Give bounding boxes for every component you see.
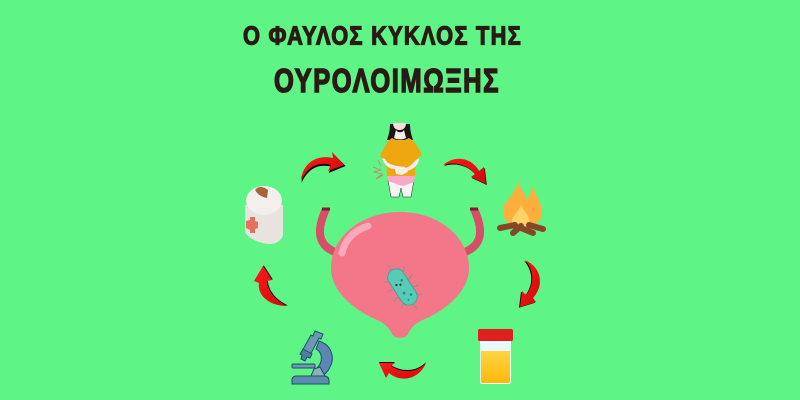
icon: microscope bbox=[292, 331, 332, 384]
red cross bbox=[246, 217, 258, 233]
icon: pill bottle bbox=[245, 186, 283, 244]
icon: bladder with bacterium bbox=[320, 209, 480, 338]
bladder highlight bbox=[342, 226, 368, 253]
shirt bbox=[380, 138, 422, 176]
arrow: bottom bbox=[379, 362, 426, 379]
arrow: left bbox=[254, 265, 288, 306]
outer flame bbox=[503, 178, 542, 227]
lid bbox=[246, 186, 282, 215]
inner flame bbox=[512, 204, 530, 226]
icon: woman in pain bbox=[373, 123, 422, 197]
legs bbox=[388, 180, 414, 197]
bladder body bbox=[331, 212, 469, 338]
arms bbox=[382, 158, 419, 175]
icon: urine sample cup bbox=[478, 329, 513, 384]
objective bbox=[300, 349, 312, 361]
red lid bbox=[478, 329, 513, 341]
arrow: right bbox=[519, 260, 540, 308]
underwear bbox=[387, 176, 415, 186]
arm bbox=[312, 341, 332, 376]
cup bbox=[480, 340, 511, 384]
logs bbox=[500, 225, 543, 233]
face bbox=[393, 123, 406, 130]
stage bbox=[292, 364, 315, 368]
right ureter bbox=[463, 209, 480, 253]
neck bbox=[394, 130, 406, 140]
left ureter bbox=[320, 209, 337, 253]
pain marks bbox=[373, 160, 383, 179]
title line 1: Ο ΦΑΥΛΟΣ ΚΥΚΛΟΣ ΤΗΣ bbox=[243, 20, 522, 50]
bottle body bbox=[245, 205, 283, 244]
base bbox=[292, 376, 329, 384]
title line 2: ΟΥΡΟΛΟΙΜΩΞΗΣ bbox=[274, 62, 500, 99]
arrow: top left bbox=[301, 152, 346, 183]
hair bbox=[387, 124, 413, 140]
urine bbox=[481, 351, 510, 383]
stage support bbox=[311, 367, 325, 376]
tube bbox=[301, 331, 323, 357]
icon: campfire bbox=[500, 178, 543, 233]
arrow: top right bbox=[443, 159, 487, 185]
lid tab bbox=[255, 187, 268, 198]
bacterium bbox=[376, 257, 429, 317]
